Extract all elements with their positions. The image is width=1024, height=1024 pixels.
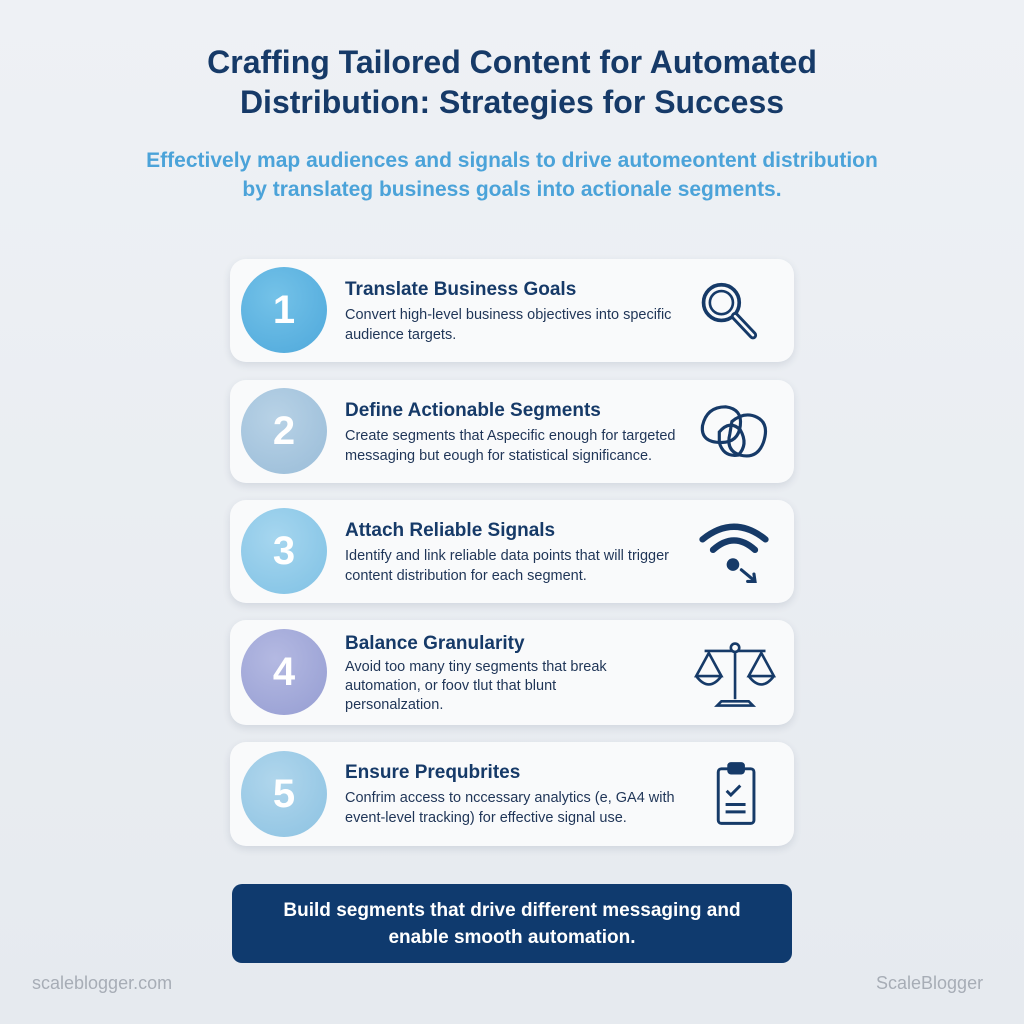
number 4 bbox=[241, 629, 327, 715]
number 5: 5 bbox=[273, 772, 295, 816]
subtitle bbox=[146, 149, 878, 201]
text 5: Confrim access to nccessary analytics (e, GA4 with event-level tracking) for effective signal use. bbox=[345, 790, 675, 826]
subtitle: by translateg business goals into actionale segments. bbox=[242, 178, 782, 201]
heading 4: Balance Granularity bbox=[345, 633, 525, 654]
subtitle: Effectively map audiences and signals to drive automeontent distribution bbox=[146, 149, 878, 172]
bottom callout: enable smooth automation. bbox=[388, 927, 636, 948]
card 2 bbox=[230, 380, 794, 483]
title: Distribution: Strategies for Success bbox=[240, 84, 784, 120]
heading 5: Ensure Prequbrites bbox=[345, 762, 520, 783]
number 3: 3 bbox=[273, 529, 295, 573]
card 5 bbox=[230, 742, 794, 846]
icon: overlapping shapes bbox=[700, 405, 768, 458]
number 3 bbox=[241, 508, 327, 594]
bottom callout bbox=[232, 884, 792, 963]
number 5 bbox=[241, 751, 327, 837]
title: Craffing Tailored Content for Automated bbox=[207, 44, 817, 80]
footer left: scaleblogger.com bbox=[32, 973, 172, 993]
icon: scale bbox=[694, 642, 776, 707]
number 1 bbox=[241, 267, 327, 353]
icon: magnifier bbox=[702, 282, 758, 340]
icon: clipboard bbox=[716, 762, 756, 825]
text 3: Identify and link reliable data points that will trigger content distribution for each segment. bbox=[345, 548, 669, 584]
icon: signal bbox=[699, 524, 769, 583]
card 4 bbox=[230, 620, 794, 725]
text 1: Convert high-level business objectives into specific audience targets. bbox=[345, 307, 671, 343]
card 1 bbox=[230, 259, 794, 362]
number 2: 2 bbox=[273, 409, 295, 453]
footer right: ScaleBlogger bbox=[876, 973, 983, 993]
title bbox=[207, 44, 817, 120]
card 3 bbox=[230, 500, 794, 603]
number 4: 4 bbox=[273, 650, 295, 694]
heading 1: Translate Business Goals bbox=[345, 279, 576, 300]
bottom callout: Build segments that drive different messaging and bbox=[283, 900, 741, 921]
heading 2: Define Actionable Segments bbox=[345, 400, 601, 421]
number 1: 1 bbox=[273, 288, 295, 332]
number 2 bbox=[241, 388, 327, 474]
heading 3: Attach Reliable Signals bbox=[345, 520, 555, 541]
text 2: Create segments that Aspecific enough for targeted messaging but eough for statistical significance. bbox=[345, 428, 675, 464]
text 4: Avoid too many tiny segments that break automation, or foov tlut that blunt personalzation. bbox=[345, 659, 607, 713]
